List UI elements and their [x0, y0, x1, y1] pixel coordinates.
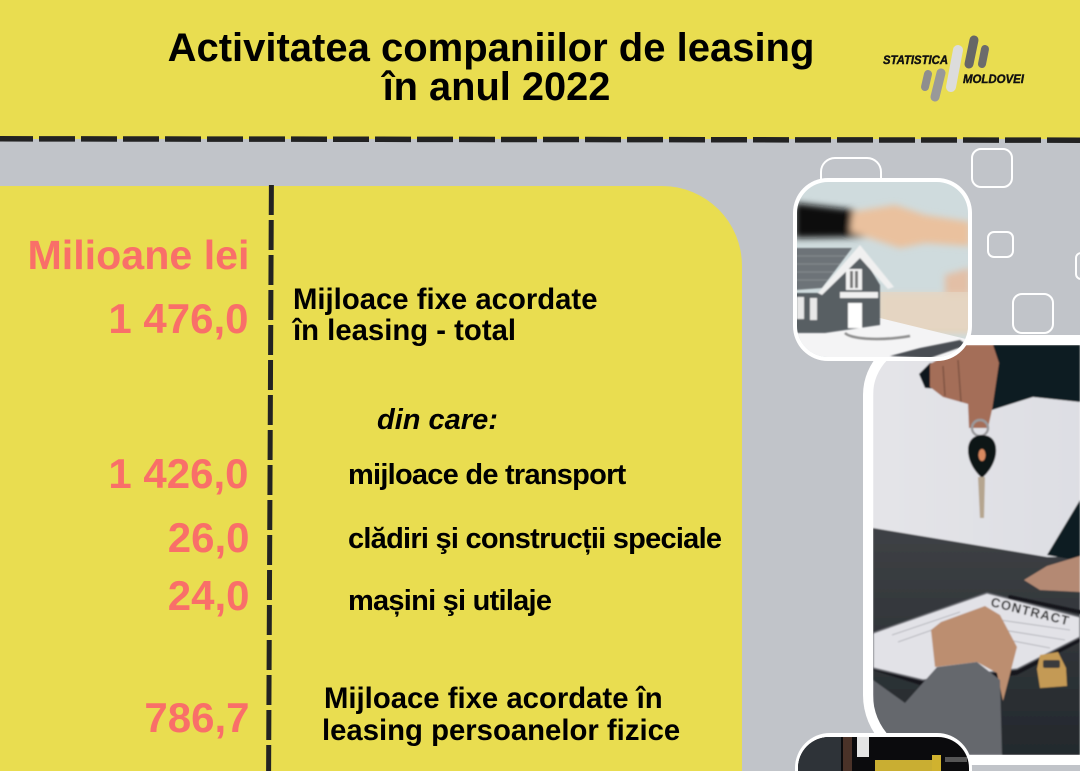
row: machinery: [168, 572, 552, 619]
row: machinery: mașini şi utilaje: [348, 585, 552, 617]
row: total: [108, 283, 598, 347]
photo: machinery (cropped): [795, 733, 972, 771]
dashed vertical divider: [269, 185, 271, 771]
row: machinery: 24,0: [168, 572, 250, 619]
column heading: Milioane lei: Milioane lei: [27, 232, 250, 278]
subheading: din care: din care:: [377, 404, 498, 436]
row: individuals: Mijloace fixe acordate în: [324, 682, 663, 715]
title: Activitatea companiilor de leasing: [168, 26, 814, 70]
row: individuals: leasing persoanelor fizice: [322, 714, 680, 747]
dashed header divider: [0, 139, 1080, 140]
row: total: Mijloace fixe acordate: [293, 283, 598, 316]
main yellow panel: [0, 186, 742, 771]
row: total: 1 476,0: [108, 295, 248, 342]
title: [168, 26, 814, 109]
decorative outlined squares: [821, 149, 1080, 333]
row: transport: 1 426,0: [108, 450, 248, 497]
row: buildings: clădiri şi construcții speciale: [348, 523, 722, 555]
row: buildings: [168, 514, 722, 561]
photo: keys and contract: [863, 335, 1080, 765]
row: individuals: 786,7: [144, 694, 250, 741]
row: transport: [108, 450, 627, 497]
row: transport: mijloace de transport: [348, 459, 627, 491]
title: în anul 2022: [381, 65, 610, 109]
logo: Statistica Moldovei: [883, 40, 1025, 97]
header band: [0, 0, 1080, 139]
photo: keys and contract: CONTRACT: [989, 594, 1071, 628]
logo: Statistica Moldovei: STATISTICA: [883, 53, 948, 67]
row: individuals: [144, 682, 680, 747]
logo: Statistica Moldovei: MOLDOVEI: [963, 72, 1025, 86]
row: total: în leasing - total: [291, 314, 516, 347]
photo: house and handshake: [793, 178, 975, 361]
row: buildings: 26,0: [168, 514, 250, 561]
